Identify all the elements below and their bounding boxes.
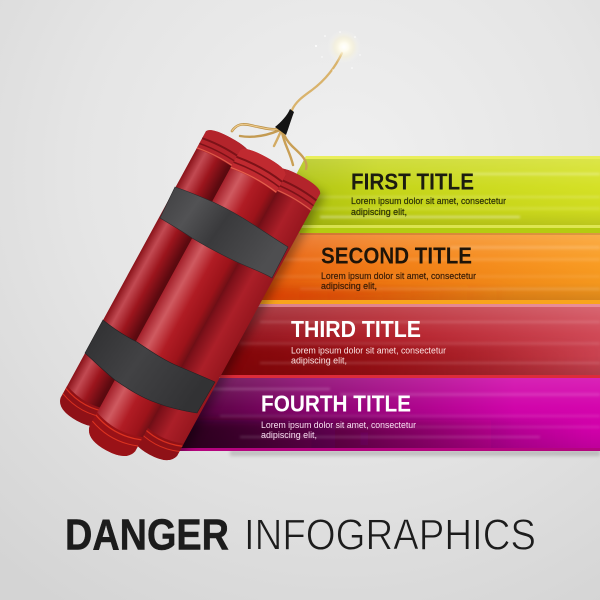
- left stick: [55, 126, 253, 433]
- bottom strap: [85, 320, 215, 413]
- second title: SECOND TITLE: [321, 242, 472, 268]
- panel: third title bar: [220, 304, 600, 385]
- second body text: adipiscing elit,: [321, 281, 377, 291]
- first title: FIRST TITLE: [351, 168, 474, 194]
- second body text: Lorem ipsum dolor sit amet, consectetur: [321, 271, 476, 281]
- fuse cap: [275, 109, 294, 135]
- icon: spark: [315, 30, 361, 71]
- middle stick: [83, 145, 289, 463]
- sticks: [49, 126, 323, 481]
- first body text: Lorem ipsum dolor sit amet, consectetur: [351, 196, 506, 206]
- fourth title: FOURTH TITLE: [261, 390, 411, 416]
- third body text: adipiscing elit,: [291, 356, 347, 366]
- fourth body text: Lorem ipsum dolor sit amet, consectetur: [261, 420, 416, 430]
- panel: fourth title bar: [180, 378, 600, 451]
- main title: [65, 510, 536, 560]
- fuse wires: [232, 53, 342, 169]
- right stick: [127, 164, 323, 466]
- first body text: adipiscing elit,: [351, 207, 407, 217]
- title: INFOGRAPHICS: INFOGRAPHICS: [244, 510, 536, 560]
- third body text: Lorem ipsum dolor sit amet, consectetur: [291, 346, 446, 356]
- third title: THIRD TITLE: [291, 316, 421, 342]
- dynamite shadow on bars: [180, 172, 328, 451]
- icon: dynamite bundle: [49, 53, 342, 481]
- bar shadow: [230, 450, 600, 456]
- panel: first title bar: [296, 156, 600, 233]
- title: DANGER: DANGER: [65, 510, 229, 560]
- fourth body text: adipiscing elit,: [261, 430, 317, 440]
- panel: second title bar: [250, 233, 600, 304]
- top strap: [160, 187, 288, 278]
